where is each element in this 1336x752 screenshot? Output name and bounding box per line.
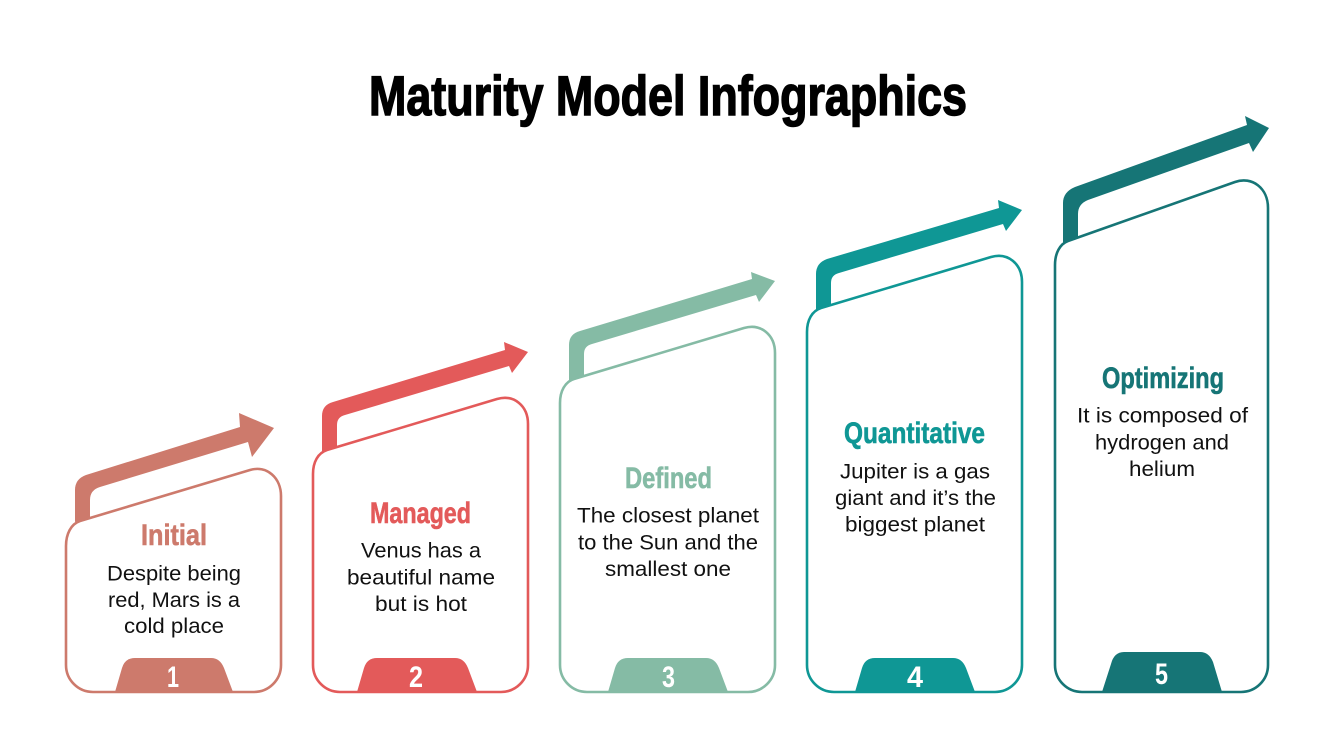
heading: Quantitative: Quantitative (844, 417, 985, 450)
number 5: 5 (1155, 658, 1168, 691)
number 3: 3 (662, 661, 675, 694)
description: step 3 (577, 504, 759, 581)
description: step 2: but is hot (375, 593, 467, 616)
description: step 3: to the Sun and the (578, 532, 758, 554)
heading: Initial: Initial (141, 519, 207, 552)
card: step 1 (66, 469, 281, 692)
panel: step 4 Quantitative (807, 200, 1022, 694)
description: step 5: helium (1129, 458, 1195, 481)
card: step 4 (807, 256, 1022, 692)
description: step 5: It is composed of (1077, 404, 1248, 428)
description: step 1: red, Mars is a (108, 589, 240, 612)
heading: Managed: Managed (370, 497, 471, 530)
description: step 4: Jupiter is a gas (840, 460, 990, 484)
badge: step 4 (855, 658, 975, 692)
description: step 3: The closest planet (577, 504, 759, 528)
arrow: step 3 (569, 272, 775, 381)
number 4: 4 (907, 661, 923, 694)
description: step 2 (347, 540, 495, 616)
title: Maturity Model Infographics (369, 64, 967, 127)
description: step 4 (835, 460, 996, 536)
number 1: 1 (167, 661, 179, 694)
heading: Optimizing: Optimizing (1102, 362, 1224, 395)
description: step 4: biggest planet (845, 514, 985, 536)
panel: step 2 Managed (313, 342, 528, 694)
arrow: step 2 (322, 342, 528, 452)
card: step 3 (560, 327, 775, 692)
badge: step 3 (608, 658, 728, 692)
description: step 1: Despite being (107, 562, 241, 586)
description: step 1 (107, 562, 241, 638)
description: step 2: Venus has a (361, 540, 481, 562)
arrow: step 5 (1063, 116, 1269, 243)
card: step 2 (313, 398, 528, 692)
description: step 2: beautiful name (347, 566, 495, 590)
panel: step 1 Initial (66, 413, 281, 694)
description: step 4: giant and it’s the (835, 487, 996, 510)
badge: step 2 (357, 658, 477, 692)
description: step 5 (1077, 404, 1248, 481)
number 2: 2 (409, 661, 423, 694)
badge: step 5 (1102, 652, 1222, 692)
arrow: step 1 (75, 413, 274, 522)
panel: step 5 Optimizing (1055, 116, 1269, 692)
heading: Defined: Defined (625, 462, 712, 495)
badge: step 1 (115, 658, 233, 692)
description: step 3: smallest one (605, 558, 731, 581)
panel: step 3 Defined (560, 272, 775, 694)
description: step 5: hydrogen and (1095, 432, 1229, 454)
arrow: step 4 (816, 200, 1022, 310)
card: step 5 (1055, 180, 1268, 692)
description: step 1: cold place (124, 615, 224, 638)
